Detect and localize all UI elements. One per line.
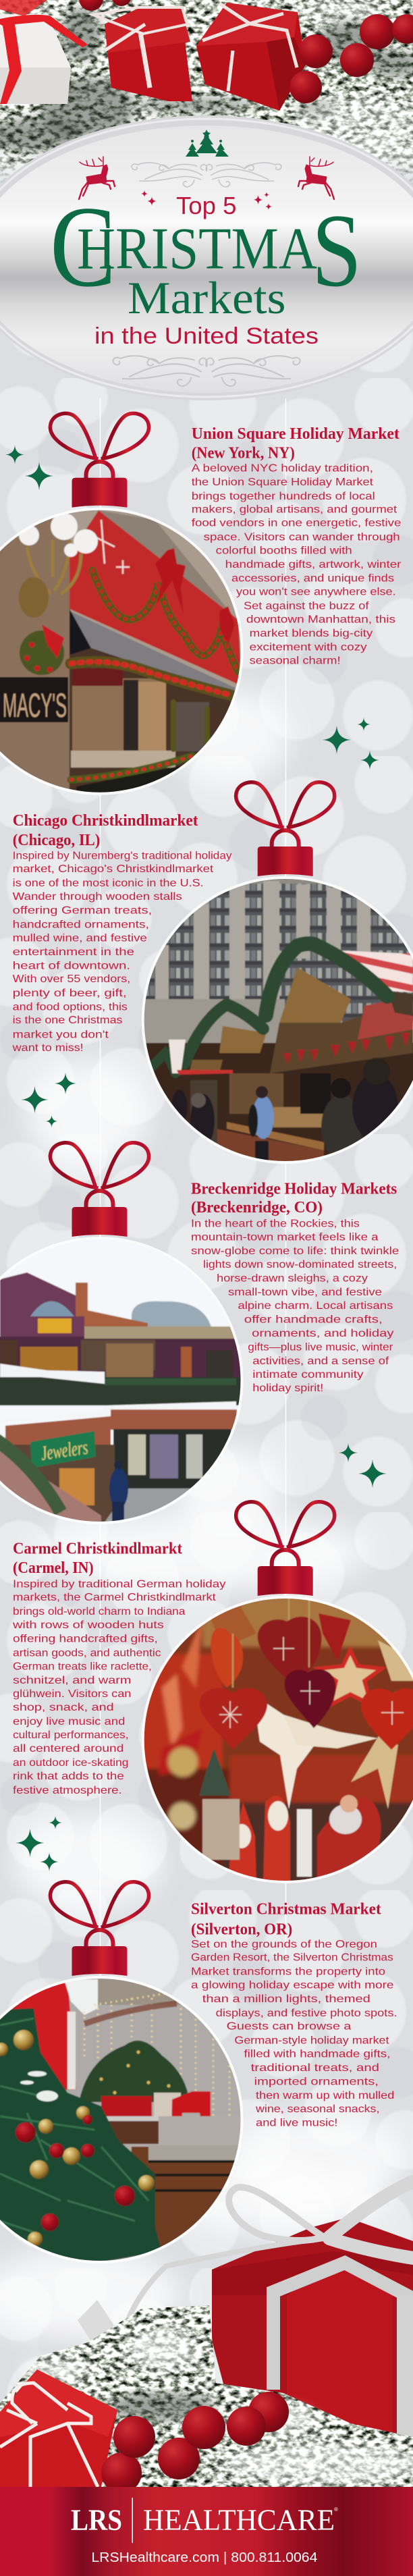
footer banner <box>0 2487 413 2576</box>
body copy: is one of the most iconic in the U.S. <box>13 878 204 889</box>
section 3 text: Breckenridge Holiday Markets <box>191 1180 399 1394</box>
body copy: glühwein. Visitors can <box>13 1688 131 1700</box>
title text: Christmas: HRISTMA <box>77 216 317 282</box>
body copy: brings old-world charm to Indiana <box>13 1606 186 1617</box>
heading <box>191 1180 397 1216</box>
body copy: brings together hundreds of local <box>192 491 375 502</box>
red gift two <box>196 3 306 111</box>
body copy: entertainment in the <box>13 946 134 958</box>
ornament 1: Macy's photo <box>0 413 243 797</box>
body copy: artisan goods, and authentic <box>13 1647 161 1659</box>
heading: (Chicago, IL) <box>13 832 100 849</box>
heading <box>13 812 198 849</box>
body copy: intimate community <box>252 1369 364 1380</box>
footer gifts photo: silver bow, red gifts, berries, pine <box>0 2182 413 2493</box>
pine branches <box>0 2305 413 2487</box>
body copy: plenty of beer, gift, <box>13 988 127 999</box>
sparkles near ornament 1 <box>5 446 379 770</box>
body copy: makers, global artisans, and gourmet <box>192 504 397 516</box>
section 1 text: Union Square Holiday Market <box>192 425 402 667</box>
heading: (Breckenridge, CO) <box>191 1199 323 1216</box>
title oval plaque <box>0 115 413 400</box>
silver ribbon bow <box>78 2182 413 2390</box>
body copy <box>192 462 402 667</box>
body copy: alpine charm. Local artisans <box>238 1300 393 1312</box>
heading: (Carmel, IN) <box>13 1559 94 1577</box>
body copy: mountain-town market feels like a <box>191 1231 379 1243</box>
logo: LRS Healthcare: LRS <box>71 2504 122 2537</box>
body copy: offering handcrafted gifts, <box>13 1633 158 1644</box>
body copy <box>12 1578 226 1796</box>
body copy: holiday spirit! <box>252 1383 323 1394</box>
body copy: small-town vibe, and festive <box>228 1287 382 1298</box>
icon: right reindeer <box>298 157 334 199</box>
body copy: enjoy live music and <box>13 1716 125 1727</box>
ornament 3: Breckenridge photo <box>0 1143 243 1527</box>
body copy: and food options, this <box>13 1001 128 1013</box>
sparkles near ornament 4 <box>16 1816 62 1871</box>
photo: Carmel heart ornaments <box>142 1593 413 1883</box>
photo: Chicago market stalls <box>138 874 413 1175</box>
red sparkles <box>141 190 272 210</box>
ornament 2: Chicago photo <box>138 782 413 1175</box>
body copy: all centered around <box>13 1743 123 1754</box>
title text: in the United States: in the United States <box>94 323 319 349</box>
body copy: wine, seasonal snacks, <box>255 2103 379 2115</box>
large glitter gift <box>212 2218 413 2447</box>
star ornament <box>319 1651 381 1705</box>
body copy: Inspired by traditional German holiday <box>13 1578 225 1590</box>
body copy: colorful booths filled with <box>216 545 352 557</box>
body copy: imported ornaments, <box>254 2076 379 2088</box>
body copy: market you don't <box>13 1029 109 1040</box>
body copy: mulled wine, and festive <box>13 932 147 944</box>
sparkles near ornament 2 <box>22 1073 76 1127</box>
logo: LRS Healthcare: HEALTHCARE <box>143 2504 335 2537</box>
body copy: a glowing holiday escape with more <box>191 1980 394 1991</box>
photo: Macy's storefront <box>0 506 243 797</box>
ornament 5: Silverton photo <box>0 1882 245 2268</box>
section 5 text: Silverton Christmas Market <box>191 1901 397 2128</box>
body copy: rink that adds to the <box>13 1771 124 1782</box>
heading: (Silverton, OR) <box>191 1921 292 1938</box>
body copy: space. Visitors can wander through <box>204 531 400 543</box>
body copy <box>191 1218 399 1394</box>
body copy: offer handmade crafts, <box>244 1314 383 1326</box>
flourish above title <box>132 163 281 187</box>
heart: upper dark <box>258 1617 322 1686</box>
body copy: gifts—plus live music, winter <box>248 1341 393 1353</box>
body copy: activities, and a sense of <box>252 1356 389 1367</box>
heart: elongated <box>211 1628 243 1688</box>
body copy: In the heart of the Rockies, this <box>191 1218 360 1229</box>
body copy: accessories, and unique finds <box>231 573 394 585</box>
heading: Breckenridge Holiday Markets <box>191 1180 397 1198</box>
heading: Union Square Holiday Market <box>192 425 400 443</box>
body copy <box>191 1939 397 2128</box>
heading <box>13 1540 182 1577</box>
logo: LRS Healthcare: ® <box>334 2506 338 2513</box>
body copy: seasonal charm! <box>250 655 341 667</box>
heading: Silverton Christmas Market <box>191 1901 381 1918</box>
body copy: excitement with cozy <box>250 641 367 653</box>
santas <box>317 1796 381 1883</box>
heart: right <box>361 1688 413 1750</box>
body copy: ornaments, and holiday <box>252 1328 394 1339</box>
sparkles near ornament 3 <box>339 1443 387 1488</box>
body copy: Guests can browse a <box>227 2020 351 2032</box>
heart: main <box>200 1688 267 1750</box>
body copy: an outdoor ice-skating <box>13 1757 128 1769</box>
header photo: gifts and snowy pine <box>0 0 413 192</box>
body copy: filled with handmade gifts, <box>244 2048 390 2060</box>
title text: Markets: Markets <box>128 272 286 323</box>
body copy: is the one Christmas <box>13 1015 123 1026</box>
body copy <box>12 851 231 1054</box>
body copy: lights down snow-dominated streets, <box>203 1259 397 1270</box>
ornament 4: Carmel photo <box>142 1502 413 1883</box>
contact line: LRSHealthcare.com | 800.811.0064 <box>91 2550 317 2565</box>
body copy: you won't see anywhere else. <box>236 586 396 598</box>
body copy: food vendors in one energetic, festive <box>192 517 402 529</box>
body copy: snow-globe come to life: think twinkle <box>191 1245 399 1257</box>
body copy: downtown Manhattan, this <box>246 614 395 626</box>
red berries <box>79 0 413 103</box>
icon: left reindeer <box>79 157 115 199</box>
body copy: With over 55 vendors, <box>13 973 130 985</box>
title text: Top 5: Top 5 <box>176 192 236 219</box>
photo: Silverton tree and barrels <box>0 1975 245 2268</box>
title text: Christmas: C <box>50 183 116 311</box>
heading <box>192 425 400 462</box>
body copy: handcrafted ornaments, <box>13 919 149 930</box>
body copy: market blends big-city <box>250 628 373 639</box>
body copy: A beloved NYC holiday tradition, <box>192 462 373 474</box>
body copy: Set against the buzz of <box>244 600 369 612</box>
body copy: Market transforms the property into <box>191 1966 385 1978</box>
body copy: festive atmosphere. <box>13 1785 122 1796</box>
body copy: and live music! <box>256 2117 337 2128</box>
photo: Breckenridge shops: Jewelers <box>39 1437 89 1465</box>
title text: Christmas <box>50 183 362 311</box>
heart: dark plum <box>285 1669 335 1728</box>
body copy: Garden Resort, the Silverton Christmas <box>191 1952 393 1964</box>
flourish below title <box>113 356 300 386</box>
photo: Breckenridge shops <box>0 1235 243 1527</box>
body copy: schnitzel, and warm <box>13 1675 131 1686</box>
logo: LRS Healthcare <box>71 2498 338 2543</box>
body copy: German treats like raclette, <box>13 1661 152 1672</box>
body copy: German-style holiday market <box>234 2035 389 2047</box>
body copy: shop, snack, and <box>13 1702 114 1713</box>
body copy: Wander through wooden stalls <box>13 891 182 903</box>
body copy: traditional treats, and <box>251 2062 379 2074</box>
photo: Macy's storefront: MACY'S <box>3 687 67 724</box>
heading: (New York, NY) <box>192 445 295 462</box>
body copy: than a million lights, themed <box>202 1993 370 2005</box>
body copy: the Union Square Holiday Market <box>192 477 373 488</box>
icon: three christmas trees <box>186 130 229 157</box>
body copy: offering German treats, <box>13 905 152 917</box>
body copy: with rows of wooden huts <box>12 1619 164 1631</box>
body copy: cultural performances, <box>13 1729 128 1741</box>
body copy: horse-drawn sleighs, a cozy <box>217 1272 368 1284</box>
heading <box>191 1901 381 1938</box>
red gift one <box>93 7 192 101</box>
heading: Chicago Christkindlmarket <box>13 812 198 830</box>
body copy: then warm up with mulled <box>256 2090 394 2101</box>
section 2 text: Chicago Christkindlmarket <box>12 812 231 1054</box>
heading: Carmel Christkindlmarkt <box>13 1540 182 1558</box>
body copy: Set on the grounds of the Oregon <box>191 1939 377 1950</box>
title text: Christmas: S <box>312 192 362 308</box>
body copy: heart of downtown. <box>13 960 130 971</box>
white gift <box>0 0 88 104</box>
body copy: handmade gifts, artwork, winter <box>225 559 402 570</box>
red berries <box>101 2392 289 2493</box>
body copy: market, Chicago's Christkindlmarket <box>13 863 214 875</box>
small red gift <box>0 2369 117 2487</box>
body copy: want to miss! <box>12 1042 84 1054</box>
body copy: Inspired by Nuremberg's traditional holiday <box>13 851 231 861</box>
body copy: markets, the Carmel Christkindlmarkt <box>13 1592 216 1603</box>
body copy: displays, and festive photo spots. <box>216 2008 397 2019</box>
section 4 text: Carmel Christkindlmarkt <box>12 1540 226 1796</box>
